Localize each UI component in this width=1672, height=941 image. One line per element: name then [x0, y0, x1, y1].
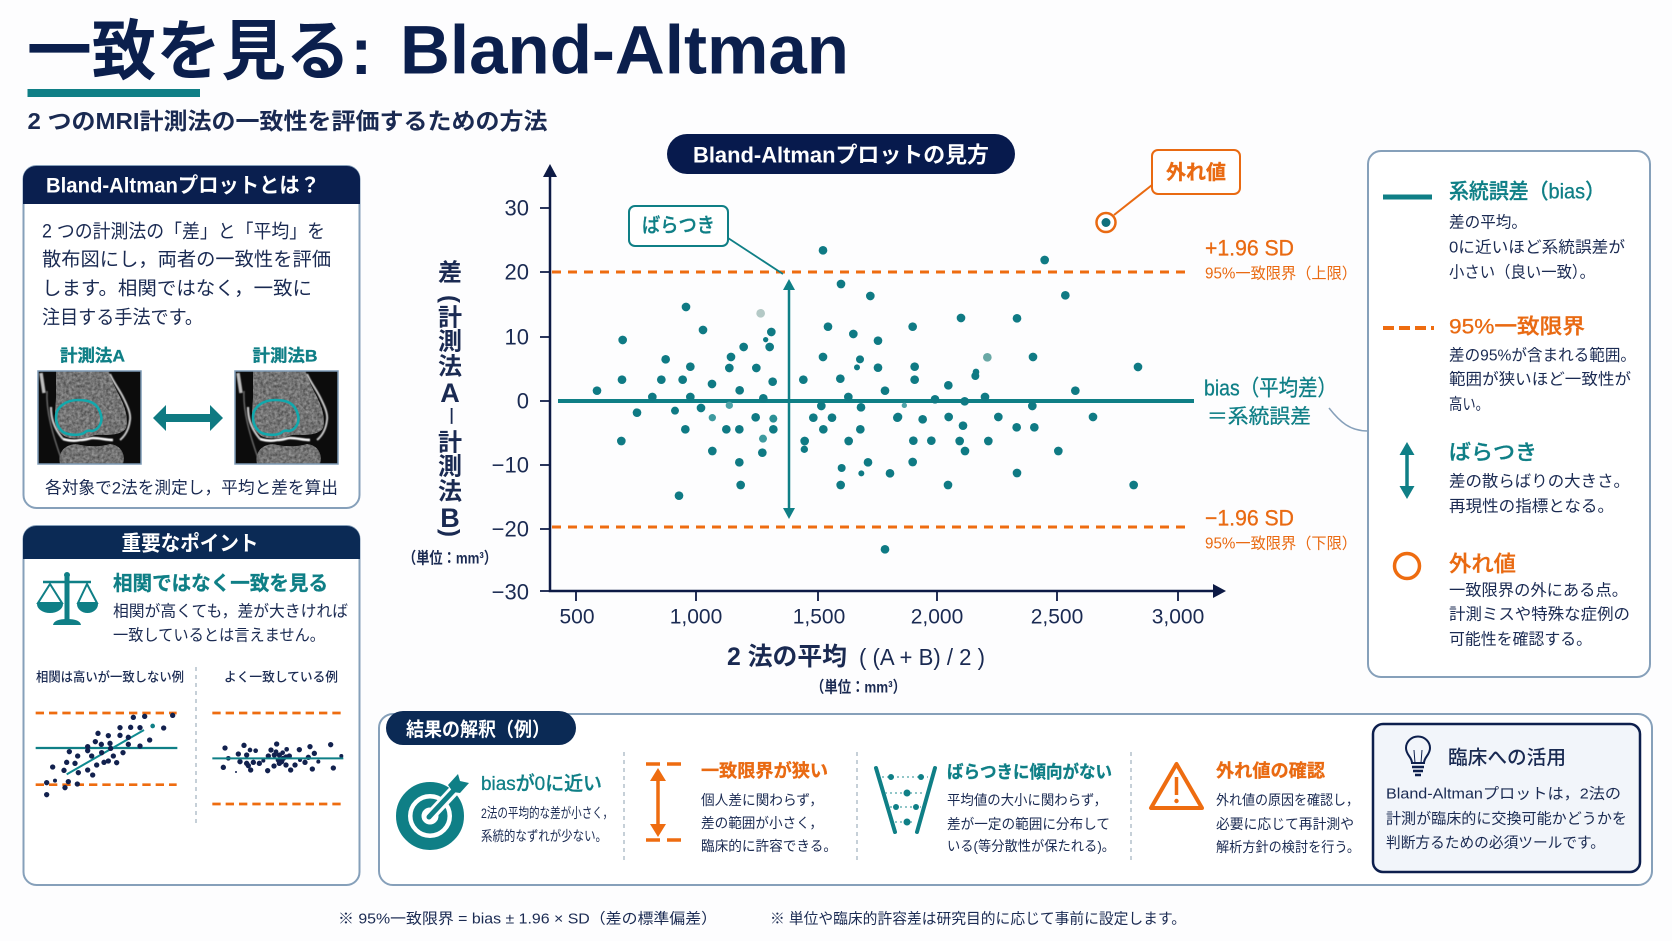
- x axis tick labels: [559, 606, 1204, 628]
- connector to legend: [1329, 408, 1368, 431]
- panel: what is a Bland-Altman plot: [23, 166, 360, 508]
- callout: spread: [629, 206, 783, 274]
- legend item: spread: 差の散らばりの大きさ。: [1449, 472, 1630, 490]
- mini chart: good agreement: [212, 713, 343, 804]
- legend item: limits of agreement: [1383, 316, 1636, 414]
- item: check outliers: 必要に応じて再計測や: [1216, 816, 1354, 832]
- caption: 各対象で2法を測定し，平均と差を算出: [45, 478, 338, 498]
- legend item: spread: ばらつき: [1449, 442, 1537, 464]
- y axis title: [436, 260, 464, 537]
- item: no trend in spread: [876, 762, 1115, 854]
- y axis title: (: [436, 295, 464, 303]
- label: bias: ＝系統誤差: [1207, 405, 1311, 428]
- heading: 相関ではなく一致を見る: [113, 572, 328, 595]
- legend item: outlier: 可能性を確認する。: [1449, 630, 1592, 648]
- arrow: compare methods: [153, 405, 223, 431]
- legend item: bias: [1383, 180, 1625, 282]
- description text: [42, 220, 331, 328]
- label: upper limit: +1.96 SD: [1205, 236, 1294, 260]
- y axis tick labels: −30: [492, 580, 529, 604]
- description text: 2 つの計測法の「差」と「平均」を: [42, 220, 325, 242]
- y axis title: 測: [438, 328, 462, 356]
- panel: result interpretation: [379, 711, 1652, 885]
- label: bias: [1204, 376, 1337, 428]
- item: bias near zero: 系統的なずれが少ない。: [481, 828, 607, 844]
- legend item: bias: 0に近いほど系統誤差が: [1449, 238, 1625, 256]
- icon: funnel ladder: [876, 768, 935, 832]
- legend item: limits of agreement: 差の95%が含まれる範囲。: [1449, 346, 1636, 364]
- y axis tick labels: 20: [505, 260, 529, 284]
- MRI image: method A: [38, 371, 141, 464]
- icon: narrow range arrow: [646, 764, 685, 840]
- legend item: limits of agreement: 95%一致限界: [1449, 316, 1585, 338]
- label: lower limit: [1205, 506, 1357, 552]
- y axis title: 計: [438, 304, 462, 332]
- item: check outliers: [1151, 761, 1360, 855]
- panel header: [23, 526, 360, 559]
- y axis title: A: [440, 378, 460, 408]
- mini chart: high correlation but poor agreement: [36, 713, 177, 797]
- panel header: Bland-Altmanプロットとは？: [46, 174, 320, 198]
- scatter points: [593, 246, 1142, 554]
- key point text: 一致しているとは言えません。: [113, 626, 325, 644]
- y axis tick labels: [492, 196, 529, 604]
- label: lower limit: −1.96 SD: [1205, 506, 1294, 530]
- label: method A: 計測法A: [60, 346, 125, 366]
- legend item: spread: 再現性の指標となる。: [1449, 498, 1614, 516]
- item: narrow limits: 臨床的に許容できる。: [701, 838, 837, 854]
- y axis tick labels: 30: [505, 196, 529, 220]
- item: no trend in spread: ばらつきに傾向がない: [947, 762, 1112, 782]
- description text: 散布図にし，両者の一致性を評価: [42, 248, 331, 270]
- item: no trend in spread: 差が一定の範囲に分布して: [947, 816, 1110, 832]
- legend item: limits of agreement: 高い。: [1449, 396, 1489, 414]
- legend item: outlier: 計測ミスや特殊な症例の: [1449, 606, 1630, 624]
- bias line: [558, 399, 1194, 403]
- y axis title: 法: [438, 478, 462, 506]
- MRI image: method B: [235, 371, 338, 464]
- description text: 注目する手法です。: [42, 306, 203, 328]
- icon: target: [402, 774, 469, 844]
- item: check outliers: 外れ値の原因を確認し，: [1216, 792, 1359, 808]
- icon: warning triangle: [1151, 764, 1202, 808]
- y axis title: 法: [438, 354, 462, 380]
- label: upper limit: 95%一致限界（上限）: [1205, 264, 1357, 282]
- x axis tick labels: 1,500: [793, 606, 845, 628]
- item: bias near zero: [402, 773, 613, 844]
- description text: します。相関ではなく，一致に: [42, 278, 312, 300]
- y axis title: 差: [438, 260, 462, 286]
- callout: outlier: 外れ値: [1166, 161, 1226, 184]
- x axis tick labels: 3,000: [1152, 606, 1204, 628]
- item: check outliers: 外れ値の確認: [1216, 761, 1325, 781]
- panel: key points: [23, 526, 360, 885]
- legend item: bias: 小さい（良い一致）。: [1449, 264, 1595, 282]
- y axis title: ー: [439, 406, 461, 426]
- label: method B: 計測法B: [252, 346, 318, 366]
- y axis tick labels: 10: [505, 324, 529, 350]
- panel: legend: [1368, 151, 1650, 677]
- item: no trend in spread: 平均値の大小に関わらず，: [947, 792, 1107, 808]
- spread arrow: [783, 279, 795, 519]
- item: bias near zero: biasが0に近い: [481, 773, 602, 795]
- item: narrow limits: 差の範囲が小さく，: [701, 815, 823, 831]
- icon: balance scale: [37, 572, 98, 625]
- x axis tick labels: 1,000: [670, 606, 722, 628]
- x axis title: [727, 643, 985, 671]
- title: Bland-Altman: [400, 12, 849, 88]
- y axis title: 計: [438, 430, 462, 456]
- legend item: outlier: 一致限界の外にある点。: [1449, 582, 1628, 600]
- x axis title: ( (A + B) / 2 ): [859, 644, 985, 670]
- y axis title: ): [436, 529, 464, 537]
- y axis tick labels: 0: [517, 388, 529, 414]
- section pill heading: 結果の解釈（例）: [406, 719, 550, 741]
- chart title pill: [667, 134, 1015, 174]
- legend item: outlier: 外れ値: [1449, 552, 1516, 576]
- legend item: spread: [1400, 442, 1630, 516]
- upper limit line: [552, 270, 1188, 274]
- y axis tick labels: −10: [492, 452, 529, 478]
- callout: clinical use: 計測が臨床的に交換可能かどうかを: [1386, 810, 1627, 828]
- legend item: bias: 系統誤差（bias）: [1449, 180, 1605, 204]
- callout: clinical use: [1373, 724, 1640, 872]
- chart: Bland-Altman plot: [403, 150, 1368, 696]
- legend item: outlier: [1394, 552, 1630, 648]
- lower limit line: [552, 526, 1188, 528]
- panel header: 重要なポイント: [122, 532, 258, 556]
- x axis tick labels: 2,000: [911, 606, 963, 628]
- small plot label: good agreement: よく一致している例: [224, 670, 338, 684]
- title accent bar: [28, 89, 200, 97]
- item: check outliers: 解析方針の検討を行う。: [1216, 839, 1360, 855]
- callout: clinical use: 判断方るための必須ツールです。: [1386, 834, 1605, 852]
- title: [27, 12, 849, 88]
- item: narrow limits: 一致限界が狭い: [701, 760, 828, 781]
- label: upper limit: [1205, 236, 1357, 282]
- icon: light bulb: [1406, 736, 1430, 775]
- key point text: [113, 602, 348, 644]
- panel header: [23, 166, 360, 204]
- chart title pill: Bland-Altmanプロットの見方: [693, 142, 989, 168]
- footnote: units: ※ 単位や臨床的許容差は研究目的に応じて事前に設定します。: [770, 910, 1186, 928]
- small plot label: poor agreement: 相関は高いが一致しない例: [36, 670, 184, 684]
- callout: spread: ばらつき: [642, 214, 715, 237]
- item: bias near zero: 2法の平均的な差が小さく，: [481, 805, 613, 821]
- x axis tick labels: 500: [559, 606, 595, 628]
- section pill heading: [386, 711, 576, 745]
- axes: [540, 164, 1226, 601]
- y axis tick labels: −20: [492, 516, 529, 542]
- title: 一致を見る:: [27, 14, 372, 88]
- item: narrow limits: 個人差に関わらず，: [701, 792, 823, 808]
- label: lower limit: 95%一致限界（下限）: [1205, 534, 1357, 552]
- label: bias: bias（平均差）: [1204, 376, 1337, 400]
- y axis title: B: [440, 503, 460, 533]
- y axis unit: （単位：mm³）: [403, 548, 497, 568]
- subtitle: 2 つのMRI計測法の一致性を評価するための方法: [28, 108, 548, 134]
- callout: clinical use: Bland-Altmanプロットは，2法の: [1386, 786, 1621, 802]
- item: narrow limits: [646, 760, 837, 854]
- callout: clinical use: 臨床への活用: [1448, 747, 1566, 769]
- footnote: formula: ※ 95%一致限界 = bias ± 1.96 × SD（差の標準偏差）: [338, 910, 717, 928]
- legend item: bias: 差の平均。: [1449, 214, 1527, 232]
- x axis tick labels: 2,500: [1031, 606, 1083, 628]
- legend item: limits of agreement: 範囲が狭いほど一致性が: [1449, 370, 1631, 388]
- item: no trend in spread: いる(等分散性が保たれる)。: [947, 838, 1115, 854]
- key point text: 相関が高くても，差が大きければ: [113, 602, 348, 620]
- y axis title: 測: [438, 454, 462, 480]
- x axis title: 2 法の平均: [727, 643, 847, 671]
- callout: outlier: [1096, 150, 1240, 232]
- x axis unit: （単位：mm³）: [811, 678, 906, 696]
